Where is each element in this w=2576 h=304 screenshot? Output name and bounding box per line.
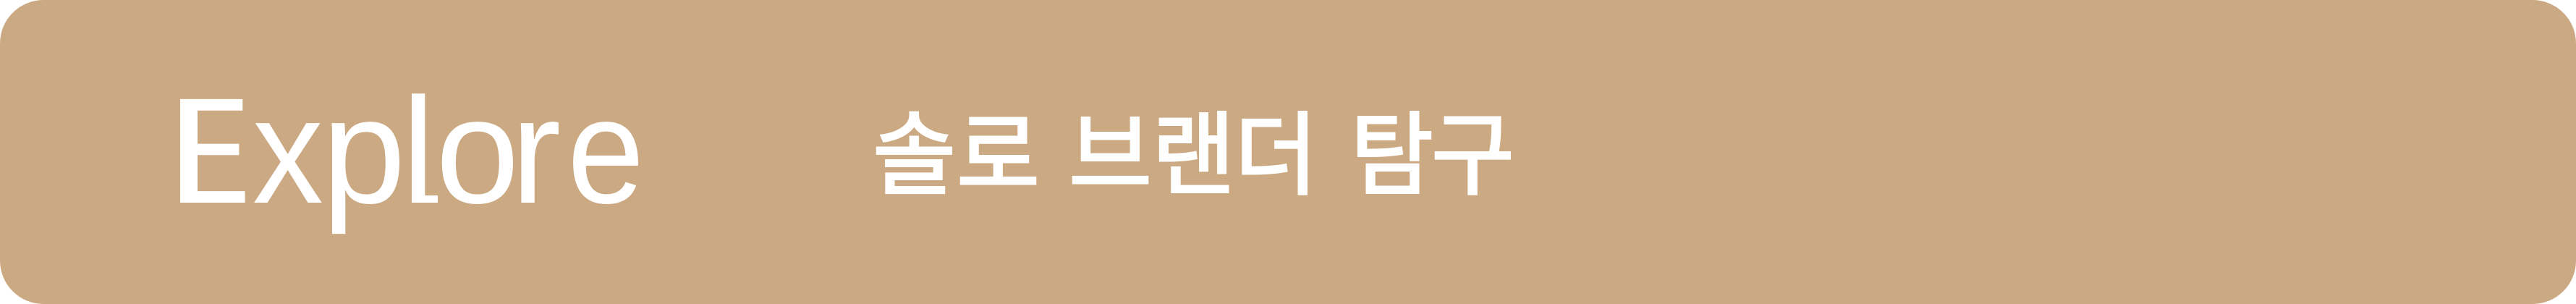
heading: Explore: e [567, 67, 644, 235]
heading: Explore: r [511, 67, 561, 235]
heading: Explore: o [436, 67, 520, 235]
heading: Explore: E [170, 67, 250, 235]
heading: Explore: x [253, 66, 323, 235]
heading: Explore: l [402, 67, 435, 235]
heading: Explore [170, 66, 644, 235]
heading: Explore: p [322, 67, 406, 235]
subheading: Korean text: 솔로브랜더탐구 [873, 106, 1514, 206]
